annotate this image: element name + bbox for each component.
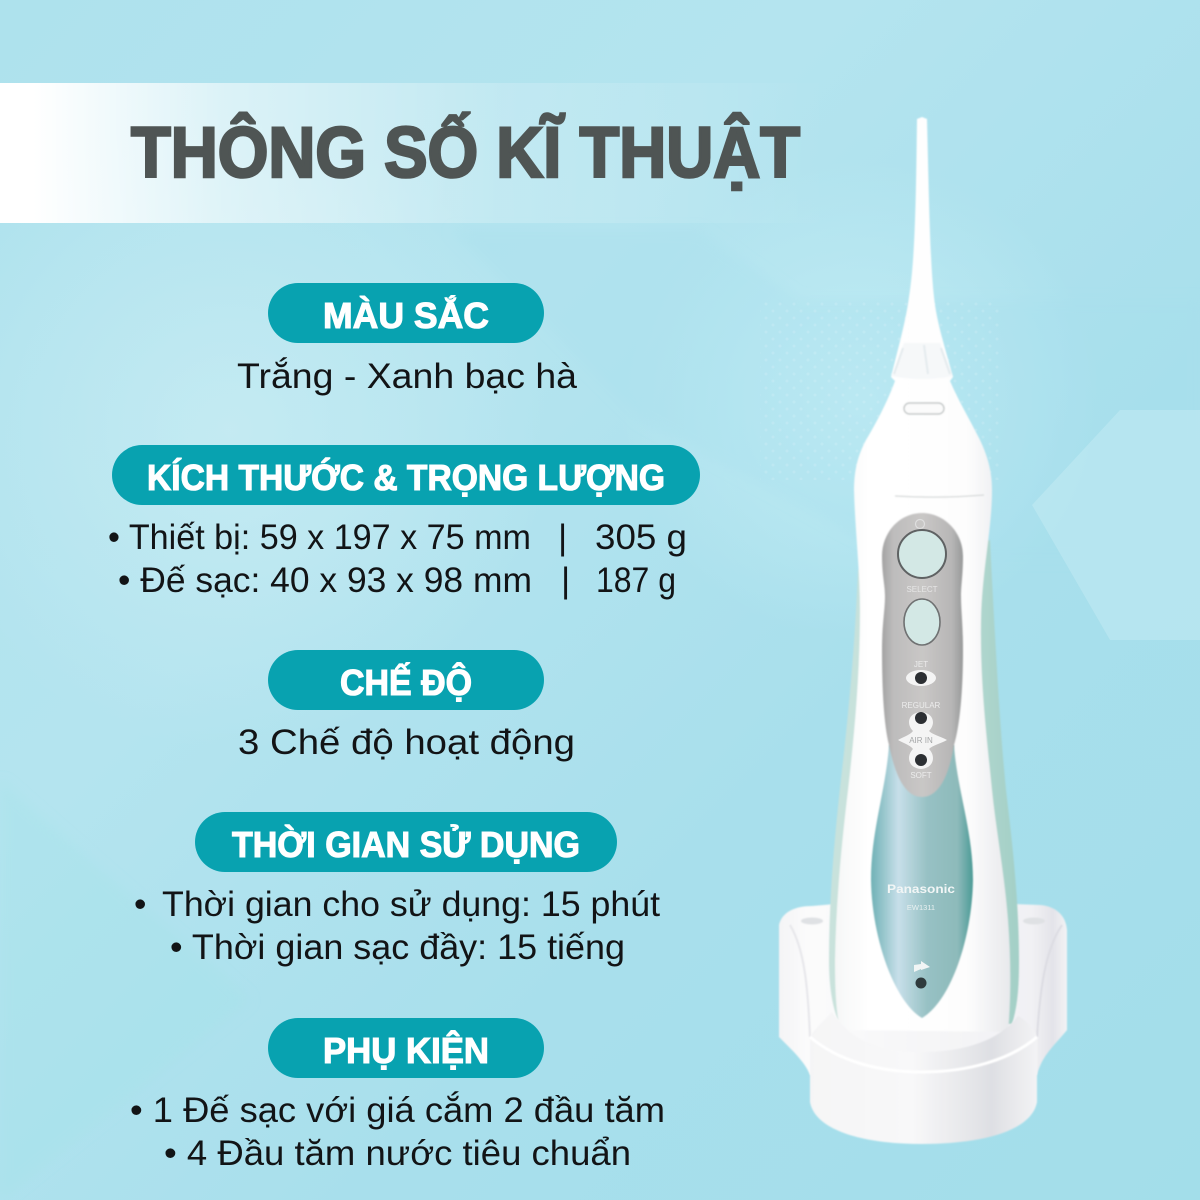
teal oval panel (871, 745, 973, 1018)
release slot (904, 403, 944, 414)
section: accessories (130, 1018, 665, 1173)
product: water flosser on charging base (779, 117, 1067, 1144)
charge light (916, 978, 926, 988)
charging base front ring (810, 1012, 1037, 1144)
power button (898, 530, 946, 578)
pill heading: usage time: THỜI GIAN SỬ DỤNG (232, 823, 580, 865)
pill heading: usage time (195, 812, 617, 872)
pill heading: accessories (268, 1018, 544, 1078)
silver control panel (882, 513, 963, 797)
device size row: • Thiết bị: 59 x 197 x 75 mm (108, 517, 531, 557)
title band (0, 83, 830, 223)
color value: Trắng - Xanh bạc hà (237, 356, 577, 396)
brand name: Panasonic (887, 882, 955, 896)
handle with nozzle (829, 117, 1019, 1032)
select label: SELECT (906, 585, 938, 594)
section: modes (238, 650, 575, 762)
mint side strips (829, 540, 1019, 1024)
pill heading: modes: CHẾ ĐỘ (340, 661, 472, 703)
modes value: 3 Chế độ hoạt động (238, 722, 575, 762)
pill heading: color (268, 283, 544, 343)
device size row: 305 g (595, 517, 687, 557)
title: THÔNG SỐ KĨ THUẬT (131, 113, 800, 193)
pill heading: color: MÀU SẮC (323, 294, 489, 336)
usage time row: • (134, 884, 146, 924)
seam line (895, 495, 984, 497)
mode indicators: REGULAR (902, 701, 941, 710)
pill heading: size and weight: KÍCH THƯỚC & TRỌNG LƯỢNG (147, 456, 665, 498)
charge icon (914, 961, 930, 972)
usage time row: Thời gian cho sử dụng: 15 phút (162, 884, 660, 924)
pill heading: modes (268, 650, 544, 710)
charging time row: • Thời gian sạc đầy: 15 tiếng (170, 927, 625, 967)
accessory row 1: • 1 Đế sạc với giá cắm 2 đầu tăm (130, 1090, 665, 1130)
section: usage time (134, 812, 660, 967)
mode indicators: JET (914, 660, 928, 669)
power symbol (916, 520, 924, 528)
charger size row: 187 g (596, 560, 676, 600)
charger size row: • Đế sạc: 40 x 93 x 98 mm (118, 560, 532, 600)
mode indicators: SOFT (910, 771, 932, 780)
device size row: | (558, 517, 567, 557)
mode indicators (898, 660, 947, 780)
section: size and weight (108, 445, 700, 600)
select button (904, 599, 940, 645)
pill heading: size and weight (112, 445, 700, 505)
model number: EW1311 (907, 903, 935, 912)
charging base wings (779, 904, 1067, 1075)
section: color (237, 283, 577, 396)
nozzle collar (892, 343, 953, 379)
mode indicators: AIR IN (909, 736, 933, 745)
pill heading: accessories: PHỤ KIỆN (323, 1029, 489, 1071)
white shell (835, 117, 1010, 1032)
charger size row: | (561, 560, 570, 600)
accessory row 2: • 4 Đầu tăm nước tiêu chuẩn (164, 1133, 631, 1173)
